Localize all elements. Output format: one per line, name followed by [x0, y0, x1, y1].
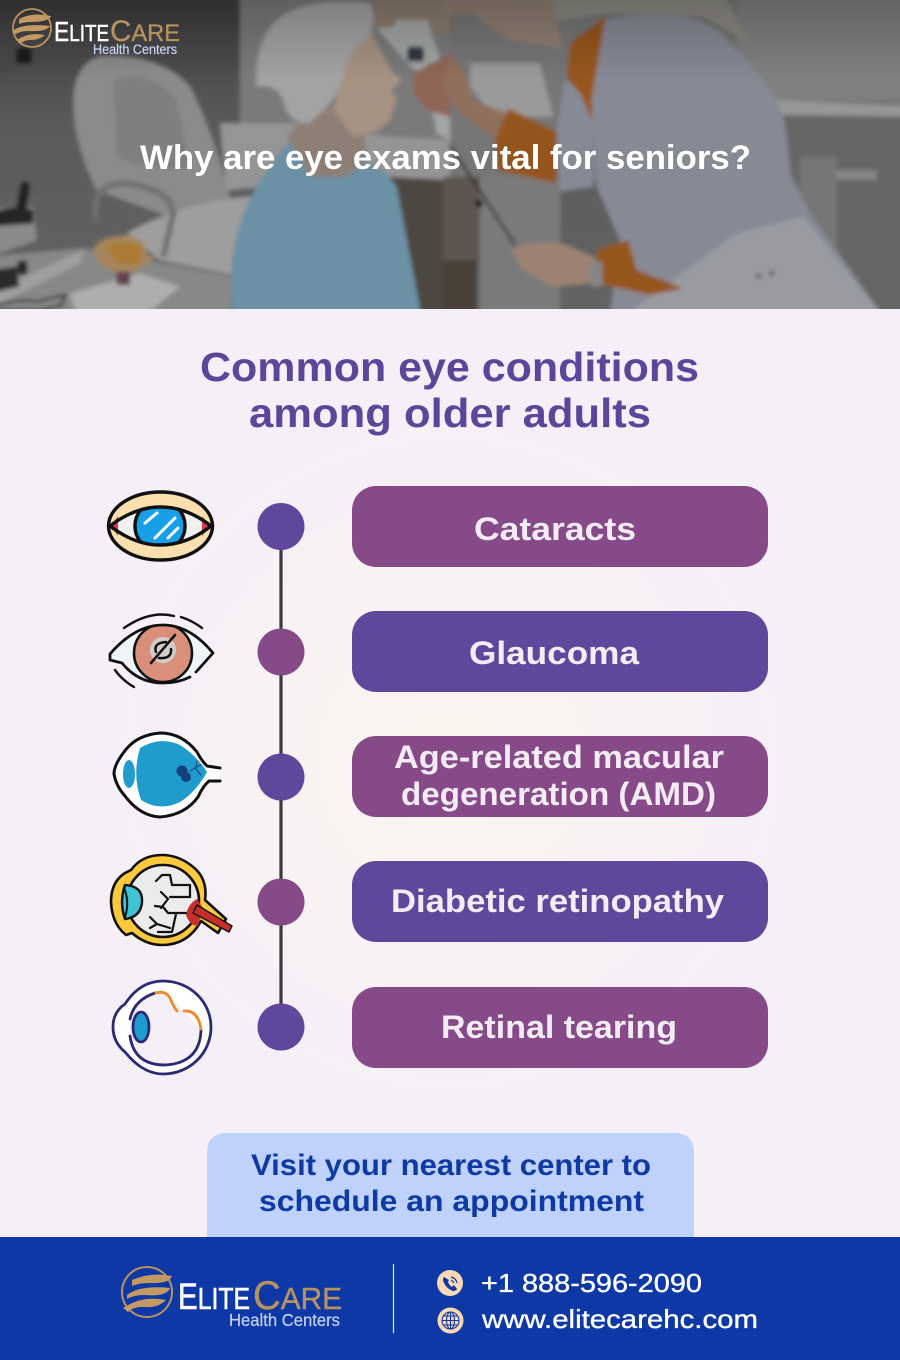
footer logo: ELITE [178, 1276, 250, 1317]
heading: common eye conditions [200, 344, 699, 436]
pill: glaucoma: Glaucoma [469, 635, 639, 671]
heading: common eye conditions: among older adults [249, 390, 651, 436]
heading: common eye conditions: Common eye conditions [200, 344, 699, 390]
icon: phone [437, 1270, 463, 1296]
pill: retinal tearing [352, 987, 768, 1068]
footer logo [122, 1267, 342, 1330]
pill: retinal tearing: Retinal tearing [441, 1009, 677, 1045]
footer band [0, 1237, 900, 1360]
icon: globe [438, 1308, 464, 1334]
phone number: +1 888-596-2090 [481, 1268, 702, 1298]
pill: age-related macular degeneration [352, 736, 768, 817]
callout: schedule an appointment: schedule an appointment [259, 1185, 644, 1218]
pill: cataracts [352, 486, 768, 567]
timeline connector [279, 526, 283, 1027]
footer divider [392, 1264, 394, 1333]
header logo: ELITE [54, 16, 109, 47]
callout: schedule an appointment: Visit your nearest center to [251, 1149, 651, 1182]
header logo: CARE [110, 15, 180, 48]
header logo [13, 9, 180, 57]
callout: schedule an appointment [207, 1133, 694, 1237]
pill: diabetic retinopathy [352, 861, 768, 942]
pill: diabetic retinopathy: Diabetic retinopathy [391, 883, 724, 919]
icon: diabetic retinopathy eye [111, 855, 232, 945]
icon: cataracts eye [108, 492, 212, 560]
timeline dots [258, 503, 304, 1050]
header logo: Health Centers [93, 42, 177, 57]
hero photo: eye exam scene [0, 0, 900, 320]
pill: glaucoma [352, 611, 768, 692]
page background [0, 309, 900, 1237]
website address: www.elitecarehc.com [481, 1304, 758, 1334]
pill: age-related macular degeneration: degeneration (AMD) [401, 776, 716, 812]
footer logo: CARE [253, 1274, 342, 1318]
icon: macular degeneration eye [114, 733, 220, 817]
pill: age-related macular degeneration: Age-related macular [394, 739, 724, 775]
pill: cataracts: Cataracts [474, 511, 636, 547]
icon: retinal tear eye [113, 981, 211, 1074]
footer logo: Health Centers [229, 1310, 340, 1330]
icon: glaucoma eye [110, 614, 213, 687]
title: Why are eye exams vital for seniors? [140, 139, 751, 177]
